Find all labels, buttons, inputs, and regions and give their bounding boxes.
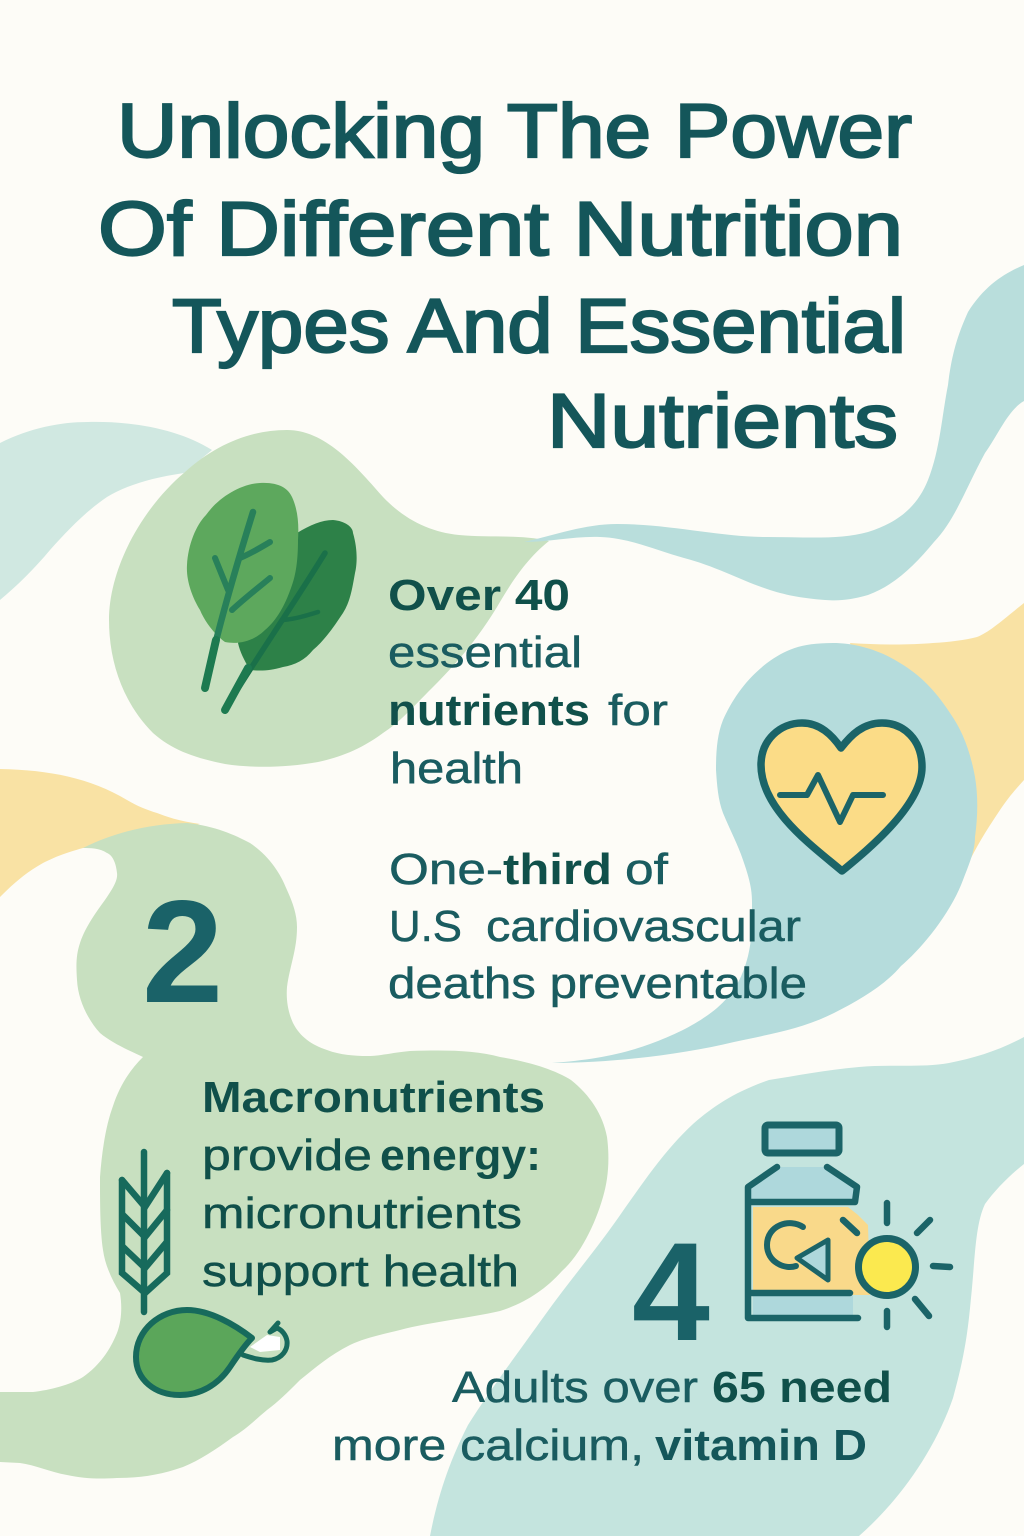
text block: over 40 essential nutrients [388,571,668,793]
text block: adults over 65 [332,1363,892,1470]
text block: adults over 65: more calcium, [332,1421,644,1470]
background wave: yellow right [850,603,1024,860]
background wave: yellow left [0,769,200,897]
text block: macronutrients [202,1073,545,1296]
text block: adults over 65: vitamin D [655,1421,867,1470]
text block: macronutrients: support health [202,1247,519,1296]
text block: one-third of deaths preventable: One- [389,845,503,894]
text block: one-third of deaths preventable: deaths preventable [388,959,807,1008]
text block: one-third of deaths preventable: U.S [389,902,462,951]
panel: teal heart blob [552,643,977,1063]
number 2: 2 [142,870,223,1033]
icon: supplement bottle and sun [748,1125,950,1327]
text block: macronutrients: provide [202,1131,372,1180]
panel: green leaf blob [109,430,549,767]
background wave: pale teal top left [0,422,212,600]
text block: over 40 essential nutrients: nutrients [388,686,590,735]
icon: spinach leaves [187,483,357,710]
background wave: teal band top right [524,265,1024,600]
panel: green number and macronutrient blob [0,823,608,1479]
text block: adults over 65: 65 need [712,1363,892,1412]
title: Types And Essential [172,284,906,369]
text block: one-third of deaths preventable: cardiovascular [486,902,801,951]
text block: adults over 65: Adults over [452,1363,698,1412]
icon: green fruit [136,1310,287,1395]
text block: macronutrients: energy: [380,1131,541,1180]
panel: teal vitamin blob [430,1037,1024,1536]
title: Nutrients [547,379,898,464]
title [98,89,912,464]
title: Unlocking The Power [117,89,912,174]
icon: heart with pulse [761,723,922,871]
icon: wheat [122,1152,167,1312]
number 4: 4 [632,1213,710,1370]
title: Of Different Nutrition [98,187,903,272]
text block: over 40 essential nutrients: health [390,744,523,793]
text block: one-third of deaths preventable: third [503,845,612,894]
text block: macronutrients: Macronutrients [202,1073,545,1122]
text block: over 40 essential nutrients: for [608,686,668,735]
text block: macronutrients: micronutrients [202,1189,522,1238]
text block: one-third of deaths preventable [388,845,807,1008]
text block: over 40 essential nutrients: essential [388,628,582,677]
text block: over 40 essential nutrients: Over 40 [388,571,570,620]
text block: one-third of deaths preventable: of [625,845,669,894]
